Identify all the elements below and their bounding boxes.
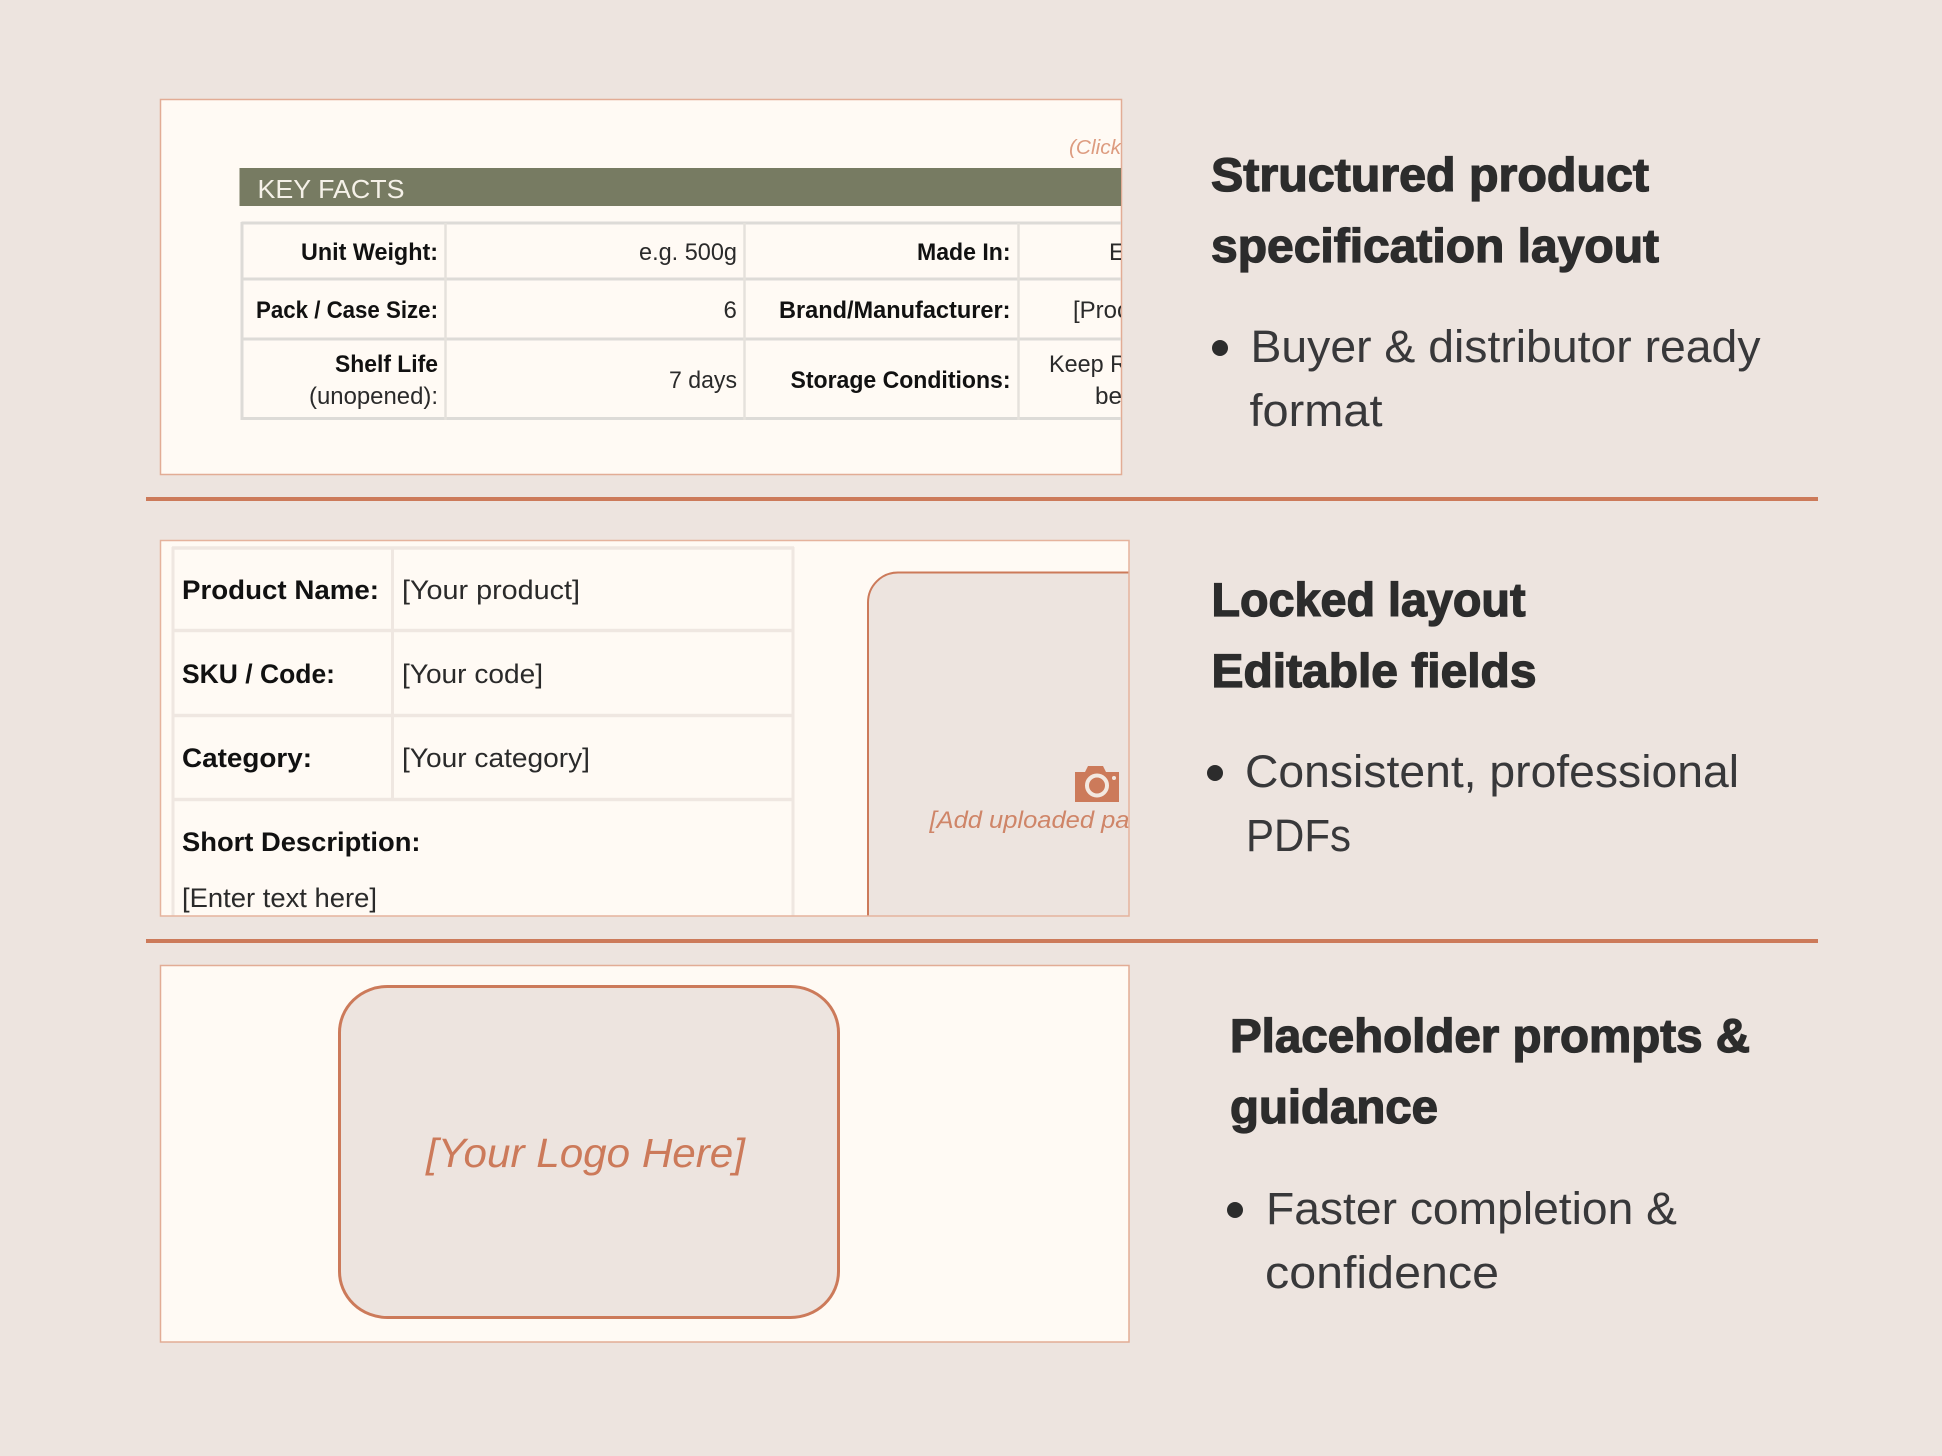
product fields table: [Enter text here] <box>182 883 377 913</box>
icon: camera <box>1075 766 1119 802</box>
key facts table: Storage Conditions: <box>790 367 1010 394</box>
panel: logo placeholder preview <box>160 966 1129 1342</box>
key facts table: (unopened): <box>309 383 438 410</box>
key facts table: be <box>1095 383 1122 410</box>
image placeholder: [Add uploaded pa <box>928 807 1130 834</box>
key facts table: [Proc <box>1073 297 1129 324</box>
heading: locked layout editable fields: Locked layout <box>1212 573 1526 626</box>
key facts table: E <box>1109 239 1125 266</box>
text block: locked layout: Editable fields <box>1212 644 1536 697</box>
text block: structured layout: format <box>1250 385 1383 436</box>
key facts table <box>242 222 1130 420</box>
divider 2 <box>146 939 1818 943</box>
text block: locked layout <box>1207 573 1739 861</box>
text block: structured layout: Buyer & distributor ready <box>1250 321 1761 372</box>
panel: key facts table preview <box>160 100 1130 474</box>
key facts table: e.g. 500g <box>639 239 737 266</box>
click hint: (Click <box>1069 137 1122 159</box>
text block: placeholder prompts: guidance <box>1230 1080 1438 1133</box>
product fields table: [Your category] <box>402 743 590 773</box>
text block: placeholder prompts: confidence <box>1265 1247 1499 1298</box>
text block: locked layout: PDFs <box>1246 810 1351 861</box>
key facts header bar <box>240 168 1130 206</box>
product fields table: Product Name: <box>182 575 379 605</box>
panel: product fields preview <box>160 540 1130 917</box>
key facts table: Keep R <box>1049 351 1127 378</box>
product fields table: SKU / Code: <box>182 659 335 689</box>
divider 1 <box>146 497 1818 501</box>
key facts table: Pack / Case Size: <box>256 297 438 324</box>
bullet <box>1207 765 1223 781</box>
key facts table: Unit Weight: <box>301 239 438 266</box>
key facts table: 7 days <box>669 367 737 394</box>
image placeholder <box>867 572 1128 916</box>
bullet <box>1212 340 1228 356</box>
product fields table: [Your code] <box>402 659 543 689</box>
product fields table: Short Description: <box>182 827 420 857</box>
key facts table: Made In: <box>917 239 1010 266</box>
product fields table <box>172 547 794 916</box>
text block: placeholder prompts <box>1227 1009 1750 1298</box>
text block: structured layout: specification layout <box>1211 219 1659 272</box>
key facts header bar: KEY FACTS <box>258 174 404 204</box>
product fields table: Category: <box>182 743 312 773</box>
logo placeholder box: [Your Logo Here] <box>425 1130 747 1176</box>
heading: placeholder prompts and guidance: Placeholder prompts & <box>1230 1009 1750 1062</box>
logo placeholder box <box>340 986 838 1318</box>
text block: placeholder prompts: Faster completion & <box>1266 1183 1677 1234</box>
key facts table: 6 <box>724 297 737 324</box>
text block: structured layout <box>1211 148 1761 436</box>
product fields table: [Your product] <box>402 575 580 605</box>
key facts table: Shelf Life <box>335 351 438 378</box>
heading: structured product specification layout: Structured product <box>1211 148 1649 201</box>
bullet <box>1227 1202 1243 1218</box>
key facts table: Brand/Manufacturer: <box>779 297 1010 324</box>
text block: locked layout: Consistent, professional <box>1245 746 1739 797</box>
